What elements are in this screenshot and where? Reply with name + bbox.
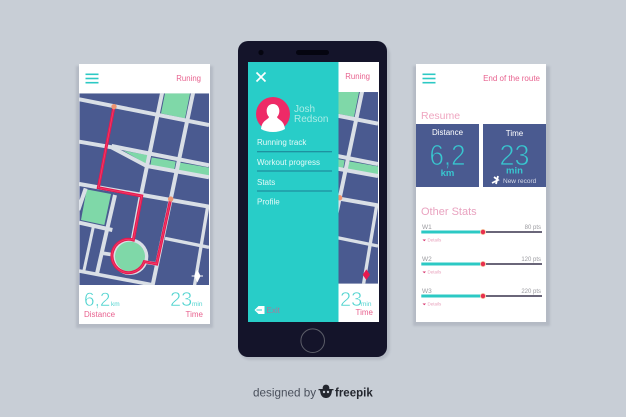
heading: Resume: Resume bbox=[421, 110, 460, 122]
stat row W1: Details bbox=[428, 238, 442, 242]
time stat bbox=[170, 289, 204, 319]
menu items bbox=[257, 138, 320, 206]
heading: Runing: Runing bbox=[176, 74, 201, 83]
stat row W2: 120 pts bbox=[521, 257, 541, 263]
card: time: New record bbox=[503, 178, 537, 185]
menu items: Running track bbox=[257, 138, 307, 147]
card: distance bbox=[416, 124, 479, 187]
phone home button bbox=[301, 329, 325, 353]
user name: Josh bbox=[294, 104, 315, 115]
footer credit: freepik bbox=[335, 388, 373, 400]
panel: left running map screen bbox=[76, 64, 213, 328]
phone: centre device bbox=[238, 41, 390, 360]
card: time: 23 bbox=[500, 140, 530, 172]
screen: map behind menu bbox=[247, 62, 379, 322]
heading: Other Stats: Other Stats bbox=[421, 206, 477, 218]
icon: freepik logo bbox=[318, 385, 334, 398]
time stat: Time bbox=[356, 308, 374, 317]
distance stat: Distance bbox=[84, 310, 116, 319]
icon: close bbox=[256, 72, 266, 82]
stat row W2 bbox=[421, 256, 542, 274]
stat row W3: 220 pts bbox=[521, 289, 541, 295]
icon: runner bbox=[492, 176, 498, 184]
panel: side menu bbox=[248, 62, 338, 322]
time stat: min bbox=[361, 301, 372, 308]
card: distance: km bbox=[441, 168, 454, 179]
time stat: min bbox=[192, 301, 203, 308]
card: time bbox=[483, 124, 546, 187]
time stat: Time bbox=[186, 310, 204, 319]
avatar bbox=[256, 97, 290, 132]
footer credit: designed by bbox=[253, 386, 316, 400]
stat row W1: 80 pts bbox=[525, 225, 541, 231]
card: distance: Distance bbox=[432, 128, 464, 137]
heading: End of the route: End of the route bbox=[483, 74, 541, 83]
menu items: Workout progress bbox=[257, 158, 320, 167]
stat row W1 bbox=[421, 224, 542, 242]
exit label: Exit bbox=[266, 306, 281, 315]
card: time: min bbox=[506, 166, 523, 176]
time stat: 23 bbox=[170, 289, 192, 311]
heading: Runing: Runing bbox=[345, 72, 370, 81]
icon: hamburger menu bbox=[422, 74, 436, 84]
user name: Redson bbox=[294, 114, 328, 125]
distance stat bbox=[84, 290, 120, 319]
map with route bbox=[78, 92, 209, 287]
infographic canvas bbox=[76, 41, 550, 399]
time stat: 23 bbox=[340, 289, 362, 311]
stat row W3: W3 bbox=[422, 288, 432, 295]
stat row W2: Details bbox=[428, 270, 442, 274]
user name bbox=[294, 104, 328, 125]
panel: right end of route screen bbox=[413, 64, 550, 326]
menu items: Profile bbox=[257, 198, 280, 206]
distance stat: km bbox=[111, 301, 120, 308]
footer credit bbox=[253, 385, 373, 400]
menu items: Stats bbox=[257, 178, 275, 187]
card: distance: 6,2 bbox=[430, 140, 466, 172]
stat row W2: W2 bbox=[422, 256, 432, 263]
icon: exit bbox=[254, 306, 264, 314]
stat row W3 bbox=[421, 288, 542, 306]
time stat bbox=[340, 289, 374, 317]
stat row W3: Details bbox=[428, 302, 442, 306]
card: time: Time bbox=[506, 129, 524, 138]
phone camera bbox=[258, 50, 264, 55]
stat row W1: W1 bbox=[422, 224, 432, 231]
phone speaker bbox=[296, 50, 329, 55]
icon: hamburger menu bbox=[86, 74, 98, 84]
distance stat: 6,2 bbox=[84, 290, 110, 311]
